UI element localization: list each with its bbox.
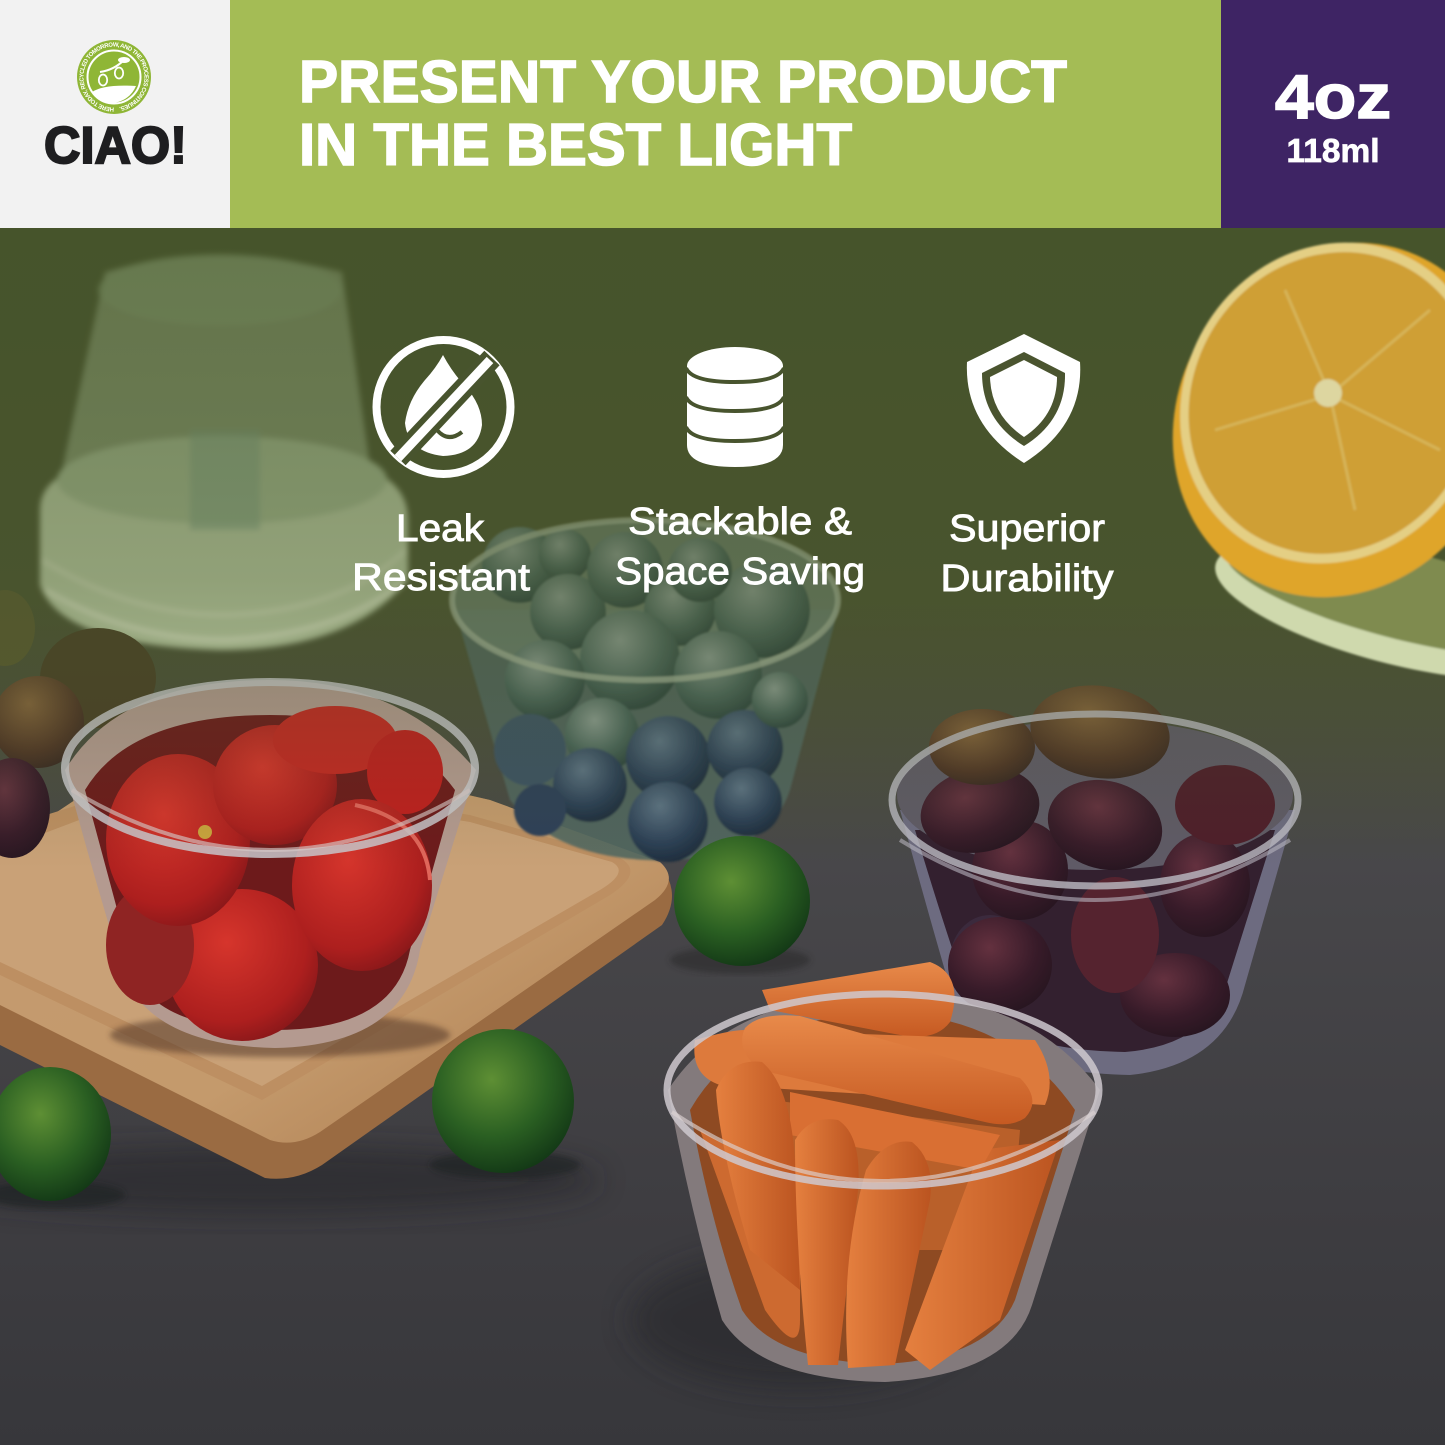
size: millilitres: 118ml	[1286, 132, 1380, 169]
logo panel	[0, 0, 230, 228]
text: superior durability: Durability	[940, 558, 1114, 600]
text: superior durability: Superior	[949, 508, 1105, 550]
logo: round olive badge: HERE TODAY, RECYCLED TOMORROW, AND THE PROCESS CONTINUES.	[79, 42, 149, 112]
icon: shield	[967, 334, 1080, 463]
logo wordmark: CIAO!	[44, 117, 187, 175]
icon: stacked cups	[686, 347, 784, 467]
text: stackable and space saving: Space Saving	[615, 551, 865, 593]
photo: loose grapes, left edge	[0, 590, 156, 858]
size: ounces: 4oz	[1275, 63, 1391, 132]
header banner	[230, 0, 1221, 228]
title: PRESENT YOUR PRODUCT	[299, 49, 1067, 115]
photo: blueberry cup	[452, 520, 838, 862]
green gradient overlay on the photo	[0, 228, 1445, 868]
text: stackable and space saving: Stackable &	[628, 501, 852, 543]
icon: leak resistant	[376, 340, 510, 474]
text: leak resistant: Leak	[396, 508, 485, 550]
size panel	[1221, 0, 1445, 228]
photo: tomato cup	[65, 680, 476, 1057]
text: leak resistant: Resistant	[352, 557, 530, 599]
title: IN THE BEST LIGHT	[299, 112, 852, 178]
photo: orange half on plate, upper right	[1109, 181, 1445, 709]
photo: limes	[0, 836, 810, 1209]
photo: carrot cup	[630, 962, 1100, 1390]
photo: wooden cutting board	[0, 728, 672, 1214]
photo: grape cup	[892, 677, 1298, 1075]
photo: stacked clear cups, upper left	[40, 254, 408, 650]
